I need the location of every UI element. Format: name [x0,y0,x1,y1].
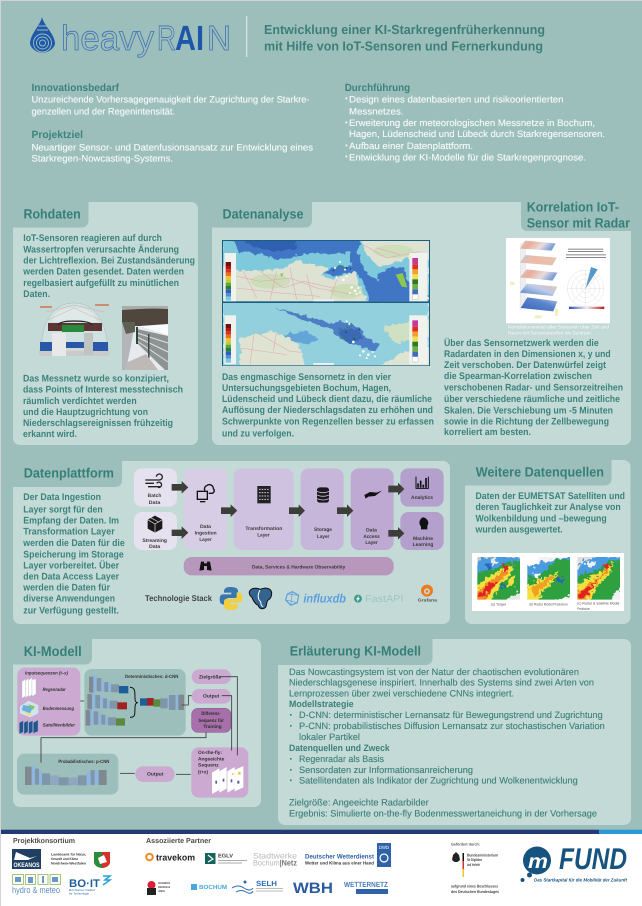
box: input sequences: Bodenmessung [43,706,74,711]
text: EUMETSAT [475,491,625,536]
box: Machine Learning [400,512,444,550]
box: input sequences: Inputsequenzen (t–x) [25,670,68,676]
panel: Datenanalyse [212,202,631,445]
logo: BO-IT: BO·IT [69,878,100,890]
text block: Innovationsbedarf: genzellen und der Regenintensität. [32,106,175,116]
text: platform description: Transformation Layer [23,526,115,538]
box: Streaming Data: Data [149,544,161,549]
heading: Datenplattform: Datenplattform [24,466,114,480]
logo: BO-IT: für Technologie [69,892,89,896]
logo: Wetternetz: WETTERNETZ [344,880,388,889]
text block: Durchführung: Aufbau einer Datenplattform. [349,140,473,151]
diagram: CNN model flow [17,668,248,798]
text: EUMETSAT: wurden ausgewertet. [475,524,563,536]
box: Batch Data: Batch [148,493,161,498]
wordmark [61,19,231,58]
box: Differenz-Sequenz für Training [192,708,231,732]
box: on-the-fly calibrated sequence: (t+x) [198,770,208,775]
text: platform description: Der Data Ingestion [23,492,101,503]
text: spearman correlation: korreliert am besten. [444,427,531,438]
text block: Projektziel: Projektziel [32,129,83,141]
text: EUMETSAT: deren Tauglichkeit zur Analyse von [476,502,621,513]
text: platform description: werden die Daten für [22,582,110,594]
text: dense network: Das engmaschige Sensornetz in den vier [222,372,391,383]
box: Streaming Data: Streaming [142,538,167,543]
logo: Okeanos: OKEANOS [14,862,40,869]
pill: Output probabilistic: Output [147,772,163,777]
text block: Durchführung: Messnetzes. [349,106,404,116]
text: spearman correlation: verschobenen Radar- und Sensorzeitreihen [444,382,623,394]
captions: (a) Target [491,602,506,606]
text block: Innovationsbedarf: Unzureichende Vorhersagegenauigkeit der Zugrichtung der Starkre- [32,94,310,104]
bundestag note: aufgrund eines Beschlusses [451,884,499,888]
logo: FastAPI: FastAPI [365,593,403,604]
box: on-the-fly calibrated sequence: Sequenz [198,763,219,768]
box: on-the-fly calibrated sequence [191,747,248,798]
text block: Durchführung: Entwicklung der KI-Modelle für die Starkregenprognose. [349,152,586,162]
logo: BO-IT: Bochumer Institut [69,888,95,892]
text block: Innovationsbedarf: Innovationsbedarf [32,82,119,94]
text: Modellstrategie: lokaler Partikel [299,732,360,742]
text: spearman correlation: Zeit verschoben. Der Datenwürfel zeigt [444,360,607,371]
text: target and result: Ergebnis: Simulierte on-the-fly Bodenmesswertaneichung in der Vorhersage [289,808,597,818]
text block: Projektziel [32,129,313,164]
box: Batch Data [134,468,177,507]
text: platform description: diverse Anwendungen [23,594,115,604]
logo: Bochum [191,884,227,891]
text: platform description: zur Verfügung gestellt. [23,606,119,616]
logo: Python [220,587,242,610]
box: Storage Layer: Layer [317,534,329,539]
box: probabilistic p-CNN: Probabilistisches: p-CNN [58,759,109,764]
text: sensor description: werden Daten gesendet. Daten werden [22,266,184,278]
logo: EGLV [205,853,247,864]
image: radar and satellite prediction [577,557,620,600]
title: mit Hilfe von IoT-Sensoren und Fernerkundung [264,38,543,54]
box: Storage Layer: Storage [314,527,332,532]
logo: Stadtwerke Bochum: Bochum|Netz [253,858,297,868]
logo: travekom: travekom [156,852,195,862]
box: Transformation Layer [234,468,294,550]
text: network concept: und die Hauptzugrichtung von [23,407,148,418]
title: Entwicklung einer KI-Starkregenfrüherkennung [264,22,545,37]
text: target and result [289,798,597,818]
logo: BO-IT [69,876,110,896]
pill: Output: Output [203,694,219,699]
logo: mFUND [520,843,627,882]
text: network concept: räumlich verdichtet werden [23,396,137,407]
tagline: Das Startkapital für die Mobilität der Zukunft [534,878,627,882]
logo: Stadtwerke Bochum: Stadtwerke [253,852,298,860]
logo: Stadtwerke Bochum [253,852,298,868]
text: network concept: Das Messnetz wurde so konzipiert, [23,374,169,384]
text: sensor description: regelbasiert aufgefüllt zu minütlichen [23,278,179,289]
box: Differenz-Sequenz für Training: Differenz- [201,711,221,716]
box: Data Ingestion Layer [184,468,227,550]
logo: SELH: SELH [256,879,277,888]
box: Streaming Data [134,512,177,550]
logo: TH Lübeck: TECHNISCHE [158,881,170,885]
wordmark: heavy [61,19,154,58]
heading: KI-Modell: KI-Modell [24,643,82,659]
heading: Datenanalyse: Datenanalyse [222,206,304,222]
text: platform description: Layer vorbereitet. Über [23,560,119,572]
caption: Korrelationsmittel aller Sensoren über Zeit und [508,324,609,330]
box: Differenz-Sequenz für Training: Training [203,724,222,729]
text: dense network [222,372,434,440]
logo: Landesamt: Umwelt und Klima [51,857,78,861]
maps: rainfall radar over Germany [222,238,430,368]
text: Datenquellen und Zweck: Regenradar als Basis [299,754,384,764]
heading: Rohdaten: Rohdaten [24,206,81,222]
text block: Durchführung: Design eines datenbasierten und risikoorientierten [349,94,564,104]
box: Data Ingestion Layer: Ingestion [195,530,217,536]
text: Modellstrategie: D-CNN: deterministischer Lernansatz für Bewegungstrend und Zugrichtung [299,710,603,720]
logo: WBH: WBH [293,880,333,897]
box: Analytics [400,468,444,507]
arrows between layers [172,481,404,540]
box: Transformation Layer: Transformation [245,526,282,531]
logo: Bochum: BOCHUM [199,884,227,891]
text: introduction: Niederschlagsgenese inspiriert. Innerhalb des Systems sind zwei Arten von [289,678,594,688]
logo: NRW crest [94,852,110,868]
box: probabilistic p-CNN [17,754,118,795]
panel: Datenplattform [13,461,450,624]
image: target [477,557,520,600]
text: platform description: Empfang der Daten. Im [23,516,119,526]
text: Datenquellen und Zweck: Satellitendaten als Indikator der Zugrichtung und Wolkenentwicklung [299,776,578,786]
captions: (c) Radar & Satellite Model [577,602,619,606]
box: on-the-fly calibrated sequence: Angeeichte [198,757,224,762]
captions [491,602,619,611]
label: Gefördert durch: [451,842,480,846]
bundestag note: des Deutschen Bundestages [451,889,500,894]
box: Differenz-Sequenz für Training: Sequenz für [198,718,224,723]
text: introduction: Lernprozessen über zwei verschiedene CNNs integriert. [289,688,514,698]
text: Modellstrategie: Modellstrategie [289,699,354,709]
logo: hydro & meteo: hydro & meteo [12,885,60,895]
heading: Korrelation: Sensor mit Radar [527,216,631,230]
wordmark: R [157,19,176,58]
text: dense network: Untersuchungsgebieten Bochum, Hagen, [222,383,391,394]
pill: Output probabilistic [135,766,175,782]
text: platform description: Speicherung im Storage [23,550,124,560]
map: upper [223,238,429,303]
title [264,22,545,54]
heading: Weitere Datenquellen [476,464,604,480]
text: target and result: Zielgröße: Angeeichte Radarbilder [289,798,429,808]
text: sensor description [22,233,195,300]
box: Data Access Layer: Data [366,527,377,533]
chart: correlation cube and polar plot [506,238,610,323]
footer: Projektkonsortium logos [12,836,110,896]
logo: TH Lübeck: LÜBECK [158,889,165,893]
logo: mFUND: FUND [559,843,627,876]
captions: Prediction [577,607,590,611]
box: Data Ingestion Layer: Data [200,524,211,529]
box: deterministic d-CNN: Deterministisches: d-CNN [125,674,178,679]
pill: Output [192,689,231,704]
ministry name [467,852,498,867]
text block: Durchführung [345,82,605,162]
text: dense network: Auflösung der Niederschlagsdaten zu erhöhen und [222,405,433,416]
panel: Rohdaten [13,202,198,445]
logo: SELH [232,879,283,893]
text: spearman correlation: die Spearman-Korrelation zwischen [444,371,592,382]
text: spearman correlation [444,337,623,438]
text: EUMETSAT: Wolkenbildung und –bewegung [476,514,607,524]
logo: InfluxDB: influxdb [303,592,346,605]
text: spearman correlation: über verschiedene räumliche und zeitliche [444,394,620,405]
logo: Landesamt: Landesamt für Natur, [51,852,86,856]
box: Machine Learning: Machine [413,536,433,541]
text block: Durchführung: Durchführung [345,82,410,94]
text block: Projektziel: Neuartiger Sensor- und Datenfusionsansatz zur Entwicklung eines [32,142,313,152]
logo: EGLV: EGLV [218,854,233,860]
footer: funding BMDV [451,842,500,894]
bar: observability [184,557,394,575]
text: spearman correlation: Radardaten in den Dimensionen x, y und [444,349,611,360]
pill: Zielgröße [192,669,231,684]
logo: mFUND: m [528,851,548,873]
box: Data Access Layer [351,468,394,550]
heading: Korrelation: Korrelation IoT- [527,200,619,214]
box: Data Access Layer: Layer [365,540,378,545]
ministry name: und Verkehr [467,862,480,867]
text: platform description [22,492,125,616]
flag stripe [462,853,464,877]
bundestag note [451,884,500,894]
label: Technologie Stack: Technologie Stack [145,594,212,603]
box: input sequences [17,668,80,736]
box: Transformation Layer: Layer [257,532,270,538]
text: network concept [23,374,183,440]
text: sensor description: IoT-Sensoren reagieren auf durch [23,233,162,244]
text: spearman correlation: sowie in die Richtung der Zellbewegung [444,416,609,428]
wordmark: AI [175,19,204,58]
text block: Durchführung: Hagen, Lüdenscheid und Lübeck durch Starkregensensoren. [349,128,605,139]
arrows and connectors [41,677,237,774]
icon: water drop [30,17,55,53]
wordmark: N [207,19,231,58]
text: network concept: Niederschlagsereignissen frühzeitig [23,418,173,429]
text: introduction: Das Nowcastingsystem ist von der Natur der chaotischen evolutionären [289,667,579,677]
text: platform description: Layer sorgt für den [23,504,103,516]
text: Datenquellen und Zweck: Datenquellen und Zweck [289,743,390,753]
illustration: sensor cross-section [39,303,109,356]
text block: Innovationsbedarf [32,82,310,116]
logo: Grafana [418,585,437,603]
text: Modellstrategie [289,699,605,742]
text: sensor description: der Lichtreflexion. Bei Zustandsänderung [23,256,195,266]
header logo: heavyRAIN [30,17,231,58]
text: Datenquellen und Zweck [289,743,578,786]
logo: Deutscher Wetterdienst: DWD [379,845,390,850]
text: dense network: und zu verfolgen. [222,428,294,440]
photo: sensors on a snowy fence [122,306,168,370]
caption: Raum mit Sensorstandort als Zentrum. [508,330,592,336]
text: platform description: den Data Access Layer [23,572,119,582]
logo: TH Lübeck: HOCHSCHULE [158,885,170,889]
icon: federal eagle [452,852,460,862]
box: input sequences: Regenradar [43,687,66,692]
map: lower [223,301,429,368]
ministry name: Bundesministerium [467,852,498,858]
text: dense network: Lüdenscheid und Lübeck dient dazu, die räumliche [222,394,432,405]
box: Storage Layer [301,468,344,550]
panel: KI-Modell [13,639,261,807]
text: spearman correlation: Über das Sensornetzwerk werden die [444,337,599,349]
box: on-the-fly calibrated sequence: On-the-fly: [198,750,222,755]
logo: InfluxDB [286,592,346,605]
captions: (b) Radar Model Prediction [529,602,568,606]
box: deterministic d-CNN [84,669,186,736]
box: Data Access Layer: Access [363,534,380,539]
logo: TH Lübeck [147,881,170,895]
text: network concept: dass Points of Interest messtechnisch [23,384,183,396]
diagram: data platform architecture [134,468,444,610]
text: Modellstrategie: P-CNN: probabilistisches Diffusion Lernansatz zur stochastischen Variation [299,721,605,731]
text: sensor description: Daten. [23,289,50,300]
ministry name: für Digitales [467,857,482,862]
logo: Landesamt: Nordrhein-Westfalen [51,862,86,866]
logo: Deutscher Wetterdienst: Deutscher Wetterdienst [305,854,375,860]
heading: Erläuterung KI-Modell [290,644,421,658]
panel: Korrelation IoT-Sensor mit Radar [444,200,642,438]
figure: satellite radar comparison [472,553,624,611]
caption [508,324,609,336]
text: network concept: erkannt wird. [23,429,77,440]
box: Data Ingestion Layer: Layer [199,537,212,542]
text: platform description: werden die Daten für die [22,538,125,549]
heading: Korrelation [527,200,631,230]
panel: Erläuterung KI-Modell [278,639,631,825]
logo: PostgreSQL [249,588,272,609]
panel: Weitere Datenquellen [465,460,630,624]
pill: Zielgröße: Zielgröße [199,675,221,680]
bar: observability: Data, Services & Hardware Observability [252,565,345,570]
heading: Projektkonsortium [13,836,75,845]
text block: Durchführung: Erweiterung der meteorologischen Messnetze in Bochum, [349,117,595,128]
text: introduction [289,667,594,698]
text: EUMETSAT: Daten der EUMETSAT Satelliten und [476,491,625,502]
logo: Landesamt [51,852,86,866]
box: Batch Data: Data [149,500,161,505]
text: dense network: Schwerpunkte von Regenzellen besser zu erfassen [222,416,434,428]
text: spearman correlation: Skalen. Die Verschiebung um -5 Minuten [444,406,613,416]
logo: Deutscher Wetterdienst [305,843,391,867]
box: Analytics: Analytics [411,495,433,500]
logo: Deutscher Wetterdienst: Wetter und Klima aus einer Hand [305,860,374,866]
text block: Projektziel: Starkregen-Nowcasting-Systems. [32,152,173,164]
text: Datenquellen und Zweck: Sensordaten zur Informationsanreicherung [299,765,473,775]
box: input sequences: Satellitenbilder [43,722,75,728]
logo: Grafana: Grafana [418,598,437,603]
footer band [1,830,642,906]
box: Machine Learning: Learning [413,542,433,547]
heading: Assoziierte Partner [146,836,211,845]
logo: Wetternetz [344,880,388,894]
text: sensor description: Wassertropfen verursachte Änderung [23,244,179,256]
footer: Assoziierte Partner logos [146,836,391,897]
image: radar prediction [527,557,570,600]
